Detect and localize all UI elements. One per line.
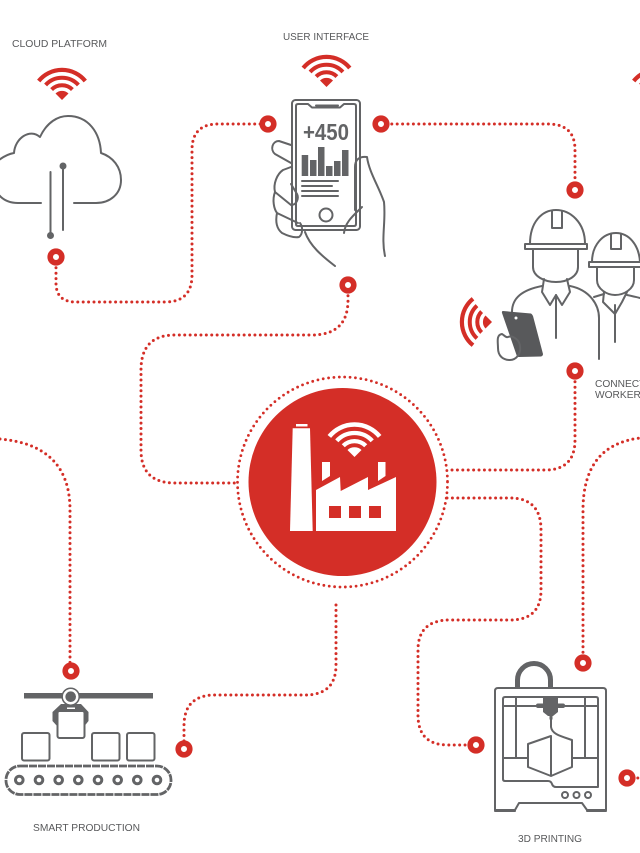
- hand holding tablet: [498, 334, 520, 360]
- label: 3D printing: 3D PRINTING: [518, 834, 582, 845]
- icon: robot arm and conveyor: [6, 688, 171, 794]
- label: cloud platform: CLOUD PLATFORM: [12, 39, 107, 50]
- claw: [52, 704, 88, 726]
- dotted connector: 3D printing to off-page: [583, 438, 640, 663]
- dotted connector: workers to factory: [447, 371, 575, 470]
- label: connected workers: [595, 379, 640, 401]
- score: +450: [303, 119, 349, 145]
- conveyor belt: [6, 766, 171, 794]
- bar chart: [302, 147, 348, 176]
- dotted connector: smart production to off-page: [0, 439, 70, 671]
- icon: wifi above phone: [303, 57, 350, 87]
- icon: partial wifi at top right: [634, 70, 640, 100]
- tablet: [502, 311, 543, 357]
- icon: wifi beside tablet: [462, 299, 492, 345]
- label: user interface: USER INTERFACE: [283, 32, 369, 43]
- filament and printed object: [528, 719, 572, 776]
- print head: [536, 697, 565, 720]
- label: smart production: SMART PRODUCTION: [33, 823, 140, 834]
- dotted connector: right node to off-page: [627, 776, 640, 780]
- back worker: [589, 233, 640, 342]
- central factory badge: [238, 377, 448, 587]
- handle: [518, 664, 550, 688]
- dotted connector: factory to smart production: [184, 605, 336, 749]
- icon: factory: [290, 424, 396, 531]
- front worker: [512, 210, 599, 359]
- icon: phone in hand: [272, 100, 385, 266]
- control buttons: [562, 792, 568, 798]
- icon: 3D printer: [495, 664, 606, 811]
- dotted connector: cloud to user interface: [56, 124, 268, 302]
- rail: [24, 693, 153, 698]
- outer frame: [495, 688, 606, 810]
- hand: [272, 141, 291, 163]
- connector nodes: [50, 118, 633, 784]
- dotted connector: user interface to factory: [141, 285, 348, 483]
- icon: wifi above cloud: [39, 70, 85, 100]
- rollers: [15, 776, 161, 784]
- icon: cloud: [0, 116, 121, 239]
- dotted connector: user interface to workers: [381, 124, 575, 190]
- pivot: [62, 688, 79, 705]
- dotted ring: [238, 377, 448, 587]
- red disc: [248, 388, 436, 576]
- icon: wifi in factory: [329, 424, 380, 457]
- boxes: [22, 711, 154, 760]
- inner frame: [503, 697, 598, 787]
- dotted connector: factory to 3D printing: [418, 498, 541, 745]
- icon: connected workers: [498, 210, 640, 360]
- phone body: [292, 100, 360, 230]
